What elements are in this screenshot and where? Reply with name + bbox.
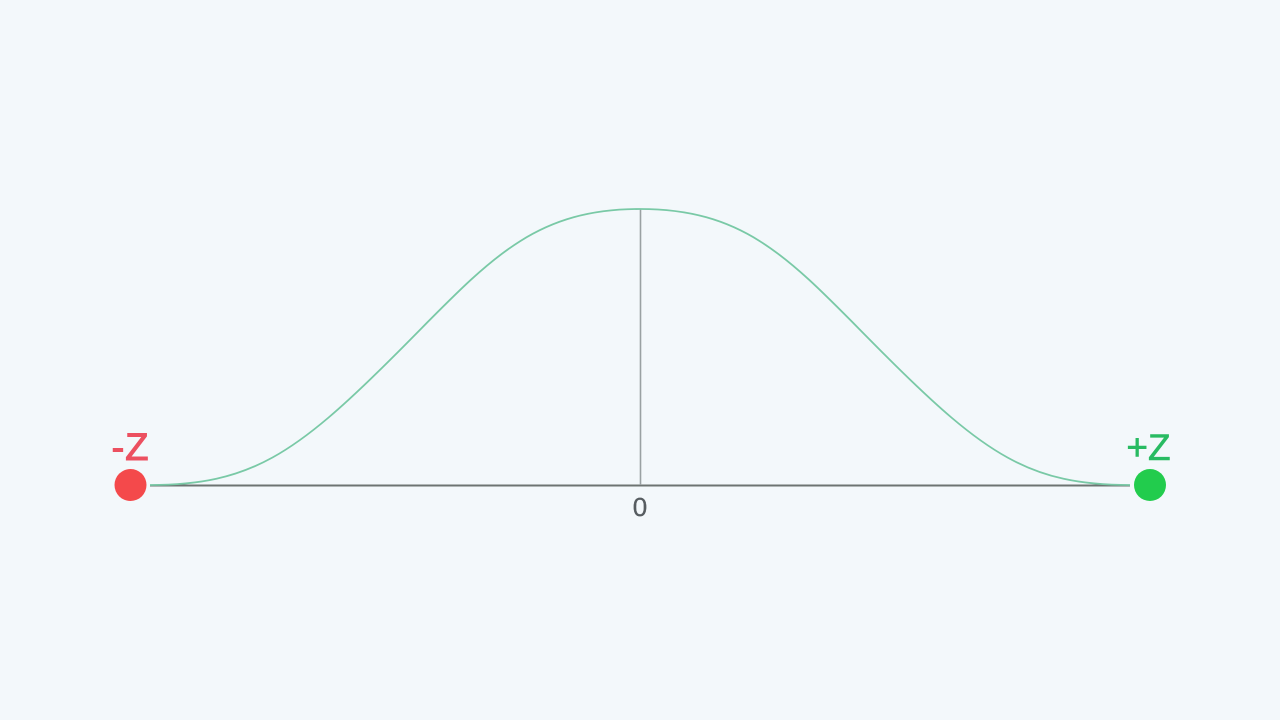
negative end marker [114,469,146,501]
label: zero: 0 [633,492,647,522]
positive end marker [1134,469,1166,501]
baseline axis [150,484,1130,486]
label: -Z: -Z [112,427,149,469]
center vertical line at zero [640,209,642,485]
bell curve [150,209,1130,485]
label: +Z: +Z [1126,427,1171,468]
